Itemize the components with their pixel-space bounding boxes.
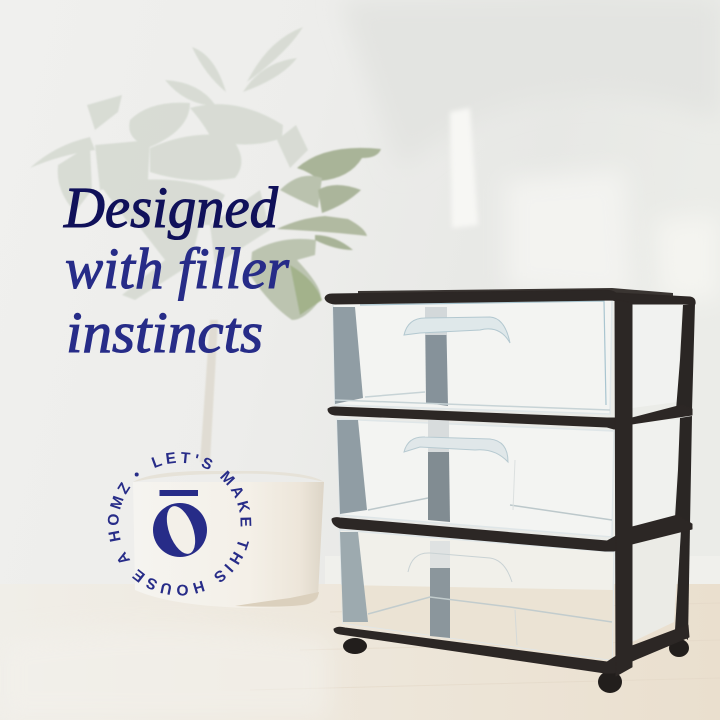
side panels [632,303,682,642]
headline line 1: Designed [63,175,279,240]
wooden floor [0,584,720,720]
drawer 1 details [335,301,610,410]
drawer 3 details [368,553,612,645]
circular slogan: LET'S MAKE THIS HOUSE A HOMZ [108,452,252,596]
headline [63,175,289,365]
second shelf [328,405,692,429]
frame shelves [325,290,695,676]
bottom shelf [334,625,689,673]
logo mark [153,490,207,558]
headline line 3: instincts [66,300,263,365]
top shelf [325,290,695,304]
drawer 2 details [368,437,612,520]
back columns [333,307,450,638]
green plant leaves [250,148,381,320]
brand badge [108,452,252,596]
lid [358,288,673,297]
casters [343,638,689,693]
floor seen through the bottom drawer [341,585,613,660]
drawer unit [325,288,695,693]
front post [615,299,632,676]
third shelf [332,515,692,551]
headline line 2: with filler [65,236,289,301]
plant pot [133,471,324,608]
drawer faces [333,299,614,660]
plant trunk [200,320,218,462]
right rear post [675,304,695,640]
faded plant leaves [30,27,308,300]
